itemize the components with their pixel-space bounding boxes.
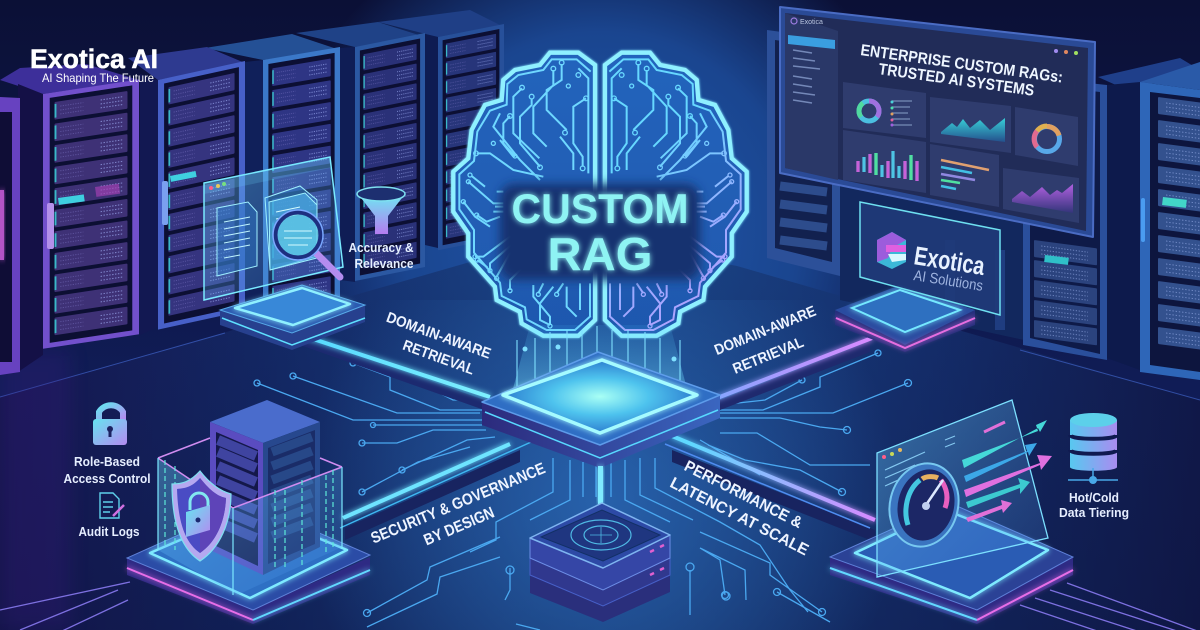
brand logo: Exotica AI <box>30 44 158 74</box>
panel: ring chart <box>1015 107 1078 166</box>
brain label: CUSTOM RAG <box>512 185 688 280</box>
rack 4 <box>296 22 425 282</box>
label: role based access control: Access Control <box>64 471 150 486</box>
glass cage <box>158 438 342 595</box>
brand logo: AI Shaping The Future <box>42 71 154 85</box>
hub base <box>482 395 720 468</box>
platform neon <box>150 510 347 598</box>
icon: funnel <box>357 187 405 234</box>
platform neon <box>235 288 350 325</box>
sidebar <box>785 13 838 180</box>
platform top <box>127 503 370 610</box>
brain <box>453 53 747 336</box>
rack behind monitor <box>767 30 1024 340</box>
performance station <box>830 400 1129 624</box>
label: hot cold data tiering: Hot/Cold <box>1069 490 1119 505</box>
hub rim lights <box>485 410 718 458</box>
arrow: pink <box>964 455 1052 497</box>
handle: rack 1 <box>47 203 54 249</box>
rack right middle <box>1023 58 1200 370</box>
brain glow halo <box>453 53 747 336</box>
pathway label: domain-aware retrieval right <box>712 303 819 378</box>
arrow: teal lower <box>966 478 1030 508</box>
icon: audit document <box>100 493 124 518</box>
storage top <box>530 503 670 568</box>
label: hot cold data tiering <box>1059 490 1129 520</box>
platform edge lights <box>127 568 253 620</box>
icon: gear <box>571 520 631 550</box>
icon: shield <box>172 471 231 561</box>
icon: documents <box>217 186 317 276</box>
label: accuracy and relevance <box>348 240 414 271</box>
central wall glow <box>200 0 1000 420</box>
document search station <box>204 157 414 350</box>
left server racks <box>0 10 504 375</box>
pathway label: domain-aware retrieval right: RETRIEVAL <box>730 334 806 378</box>
label: audit logs: Audit Logs <box>78 524 140 539</box>
monitor heading: ENTERPRISE CUSTOM RAGs: <box>859 42 1064 87</box>
circuit traces on floor <box>0 350 1200 630</box>
logo panel: AI Solutions <box>912 267 984 295</box>
beam: bottom-left <box>340 438 540 540</box>
logo text: Exotica <box>912 240 987 281</box>
arrow: teal top <box>962 420 1047 468</box>
dashboard monitor <box>780 7 1095 352</box>
beam: bottom-right <box>665 436 875 542</box>
brain label: CUSTOM RAG: CUSTOM <box>512 185 688 232</box>
icon: database <box>1068 413 1118 484</box>
beam: top-right <box>712 338 872 412</box>
right hemisphere <box>605 53 747 336</box>
arrows <box>962 420 1052 522</box>
logo platform <box>835 285 975 352</box>
panel: line chart <box>930 97 1011 153</box>
panel: bar chart <box>843 130 926 193</box>
storage layer 2 <box>530 552 670 606</box>
monitor screen <box>785 13 1088 231</box>
platform base <box>830 557 1073 624</box>
pathway label: performance and latency: LATENCY AT SCALE <box>667 475 811 559</box>
platform neon <box>855 510 1048 598</box>
pathway label: security and governance: SECURITY & GOVERNANCE <box>369 460 548 547</box>
rack 3 <box>205 34 340 322</box>
rack far right <box>1140 62 1200 380</box>
arrow: blue <box>964 443 1037 482</box>
pathway label: domain-aware retrieval left: DOMAIN-AWARE <box>384 309 493 363</box>
monitor heading: TRUSTED AI SYSTEMS <box>877 61 1036 100</box>
hub top <box>482 352 720 445</box>
logo panel <box>860 202 1000 315</box>
right server racks <box>767 30 1200 380</box>
icon: magnifier <box>273 210 340 277</box>
panel: donut overview <box>843 82 926 138</box>
pathway label: domain-aware retrieval right: DOMAIN-AWARE <box>712 303 819 359</box>
panel: area chart <box>1003 168 1079 223</box>
icon: padlock <box>93 405 127 445</box>
dark text band <box>500 184 700 280</box>
rack 0 <box>0 97 20 375</box>
storage inner panel <box>541 510 660 561</box>
rack 1 <box>0 64 139 372</box>
label: role based access control: Role-Based <box>74 454 140 469</box>
label: hot cold data tiering: Data Tiering <box>1059 505 1129 520</box>
rack 5 <box>378 10 504 250</box>
stacked storage unit <box>530 466 670 622</box>
rack 2 <box>128 47 245 335</box>
brain label: CUSTOM RAG: RAG <box>548 228 652 280</box>
arrow: pink lower <box>966 500 1012 522</box>
label: role based access control <box>64 454 150 486</box>
platform edge lights <box>830 568 977 620</box>
pathway label: domain-aware retrieval left: RETRIEVAL <box>400 337 477 379</box>
platform top <box>220 285 365 333</box>
sidebar: Exotica <box>800 19 823 26</box>
storage layer 1 <box>530 535 670 590</box>
icon: shield lock <box>190 493 208 513</box>
beam: top-left <box>295 333 490 412</box>
connector beams from hub <box>295 333 875 542</box>
storage layer 3 <box>530 570 670 622</box>
glass dashboard <box>877 400 1048 577</box>
icon: exotica logo <box>877 232 906 269</box>
glass window <box>204 157 343 300</box>
pathway label: security and governance: BY DESIGN <box>421 504 497 549</box>
label: accuracy and relevance: Relevance <box>354 256 414 271</box>
handle: rack 2 <box>162 181 168 225</box>
left hemisphere <box>453 53 595 336</box>
central hub <box>482 325 720 468</box>
platform top <box>830 503 1073 610</box>
hub core <box>503 360 697 433</box>
platform <box>220 305 365 350</box>
label: accuracy and relevance: Accuracy & <box>348 240 414 255</box>
monitor frame <box>780 7 1095 237</box>
icon: gauge <box>881 456 967 554</box>
window dots <box>1054 49 1078 55</box>
floor <box>0 240 1200 630</box>
panel: horizontal bars <box>930 144 999 207</box>
server tower <box>210 400 320 575</box>
pathway label: performance and latency: PERFORMANCE & <box>681 458 805 532</box>
light beams to brain <box>510 325 690 400</box>
platform base <box>127 557 370 624</box>
connection to hub <box>598 466 603 504</box>
security station <box>64 400 370 624</box>
